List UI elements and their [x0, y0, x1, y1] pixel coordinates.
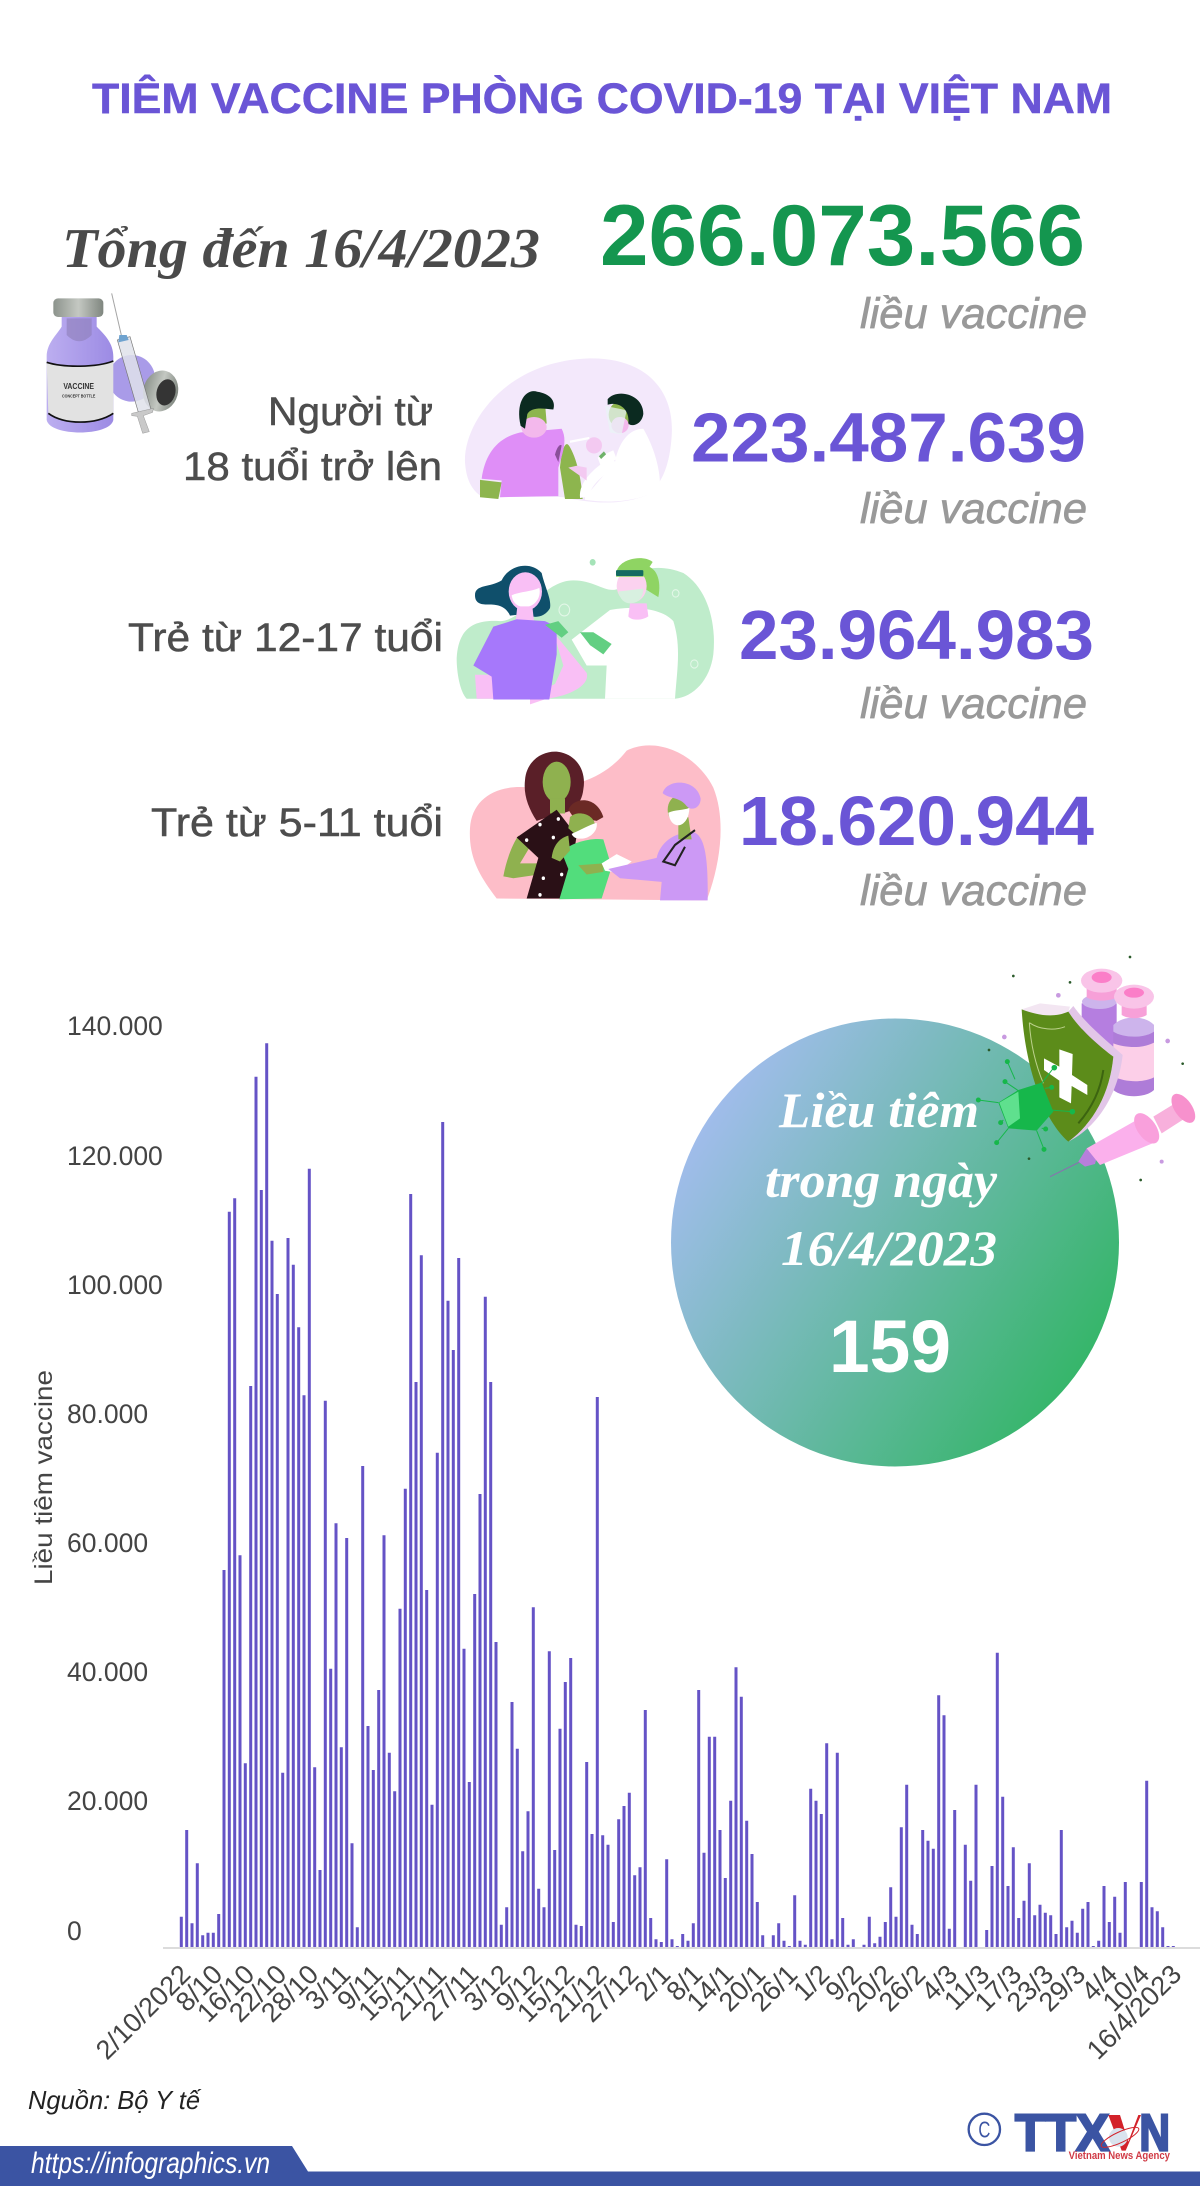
x axis date labels: 9/11 [331, 1959, 388, 2016]
label: 5-11: Trẻ từ 5-11 tuổi [151, 801, 443, 845]
y axis labels [67, 1011, 163, 1946]
x axis date labels: 20/1 [713, 1959, 771, 2017]
icon: vaccine bottle and syringe: CONCEPT BOTTLE [62, 393, 96, 399]
icon: shield, virus, vials and syringe [976, 956, 1200, 1181]
callout text [765, 1082, 998, 1276]
x axis date labels: 3/12 [458, 1959, 516, 2017]
bar chart: daily doses [30, 1011, 1200, 2065]
x axis date labels: 22/10 [223, 1959, 292, 2028]
x axis date labels: 11/3 [938, 1959, 995, 2016]
panel: children 5-11 [151, 745, 1094, 915]
x axis date labels: 29/3 [1033, 1959, 1091, 2017]
adult number: 223.487.639 [691, 398, 1086, 476]
x axis date labels: 28/10 [255, 1959, 324, 2028]
child unit: liều vaccine [860, 867, 1087, 915]
daily bars [181, 1043, 1173, 1947]
total heading: Tổng đến 16/4/2023 [62, 218, 540, 280]
panel: adults 18+ [183, 358, 1087, 533]
y axis labels: 100.000 [67, 1270, 163, 1300]
callout text: trong ngày [765, 1152, 998, 1208]
source note: Nguồn: Bộ Y tế [28, 2085, 202, 2115]
x axis date labels: 2/1 [628, 1959, 676, 2007]
x axis date labels: 9/2 [819, 1959, 867, 2007]
label: 18 and over: Người từ [268, 390, 433, 434]
total number: 266.073.566 [600, 188, 1085, 284]
icon: vaccine bottle and syringe: VACCINE [63, 381, 94, 391]
title: TIÊM VACCINE PHÒNG COVID-19 TẠI VIỆT NAM [92, 74, 1112, 123]
callout number: 159 [829, 1305, 951, 1388]
y axis labels: 0 [67, 1916, 82, 1946]
x axis date labels: 16/10 [191, 1959, 260, 2028]
x axis date labels: 17/3 [969, 1959, 1027, 2017]
x axis date labels: 21/12 [543, 1959, 612, 2028]
child number: 18.620.944 [739, 782, 1094, 860]
x axis date labels [90, 1959, 1187, 2065]
y axis labels: 60.000 [67, 1528, 148, 1558]
y axis labels: 140.000 [67, 1011, 163, 1041]
teen unit: liều vaccine [860, 680, 1087, 728]
y axis labels: 20.000 [67, 1786, 148, 1816]
x axis date labels: 26/1 [745, 1959, 803, 2017]
gradient circle [671, 1018, 1119, 1466]
illustration: teen vaccination [457, 558, 714, 704]
x axis date labels: 9/12 [490, 1959, 548, 2017]
y axis labels: 120.000 [67, 1141, 163, 1171]
x axis date labels: 27/11 [417, 1959, 484, 2027]
logo: TTXVN: C [978, 2117, 990, 2143]
x axis date labels: 1/2 [787, 1959, 835, 2007]
label: 12-17: Trẻ từ 12-17 tuổi [128, 616, 443, 660]
panel: total doses [62, 188, 1087, 338]
x axis date labels: 21/11 [385, 1959, 452, 2027]
adult unit: liều vaccine [860, 485, 1087, 533]
total unit: liều vaccine [860, 290, 1087, 338]
logo: TTXVN: TTX [1015, 2104, 1109, 2162]
x axis date labels: 15/12 [511, 1959, 580, 2028]
logo: TTXVN: N [1139, 2104, 1170, 2162]
website link: https://infographics.vn [31, 2147, 270, 2180]
x axis date labels: 15/11 [353, 1959, 420, 2027]
x axis date labels: 4/4 [1075, 1959, 1123, 2007]
x axis date labels: 26/2 [873, 1959, 931, 2017]
x axis date labels: 14/1 [681, 1959, 739, 2017]
y axis labels: 40.000 [67, 1657, 148, 1687]
x axis date labels: 23/3 [1001, 1959, 1059, 2017]
x axis date labels: 27/12 [575, 1959, 644, 2028]
callout text: Liều tiêm [778, 1082, 979, 1138]
illustration: child vaccination [470, 745, 721, 900]
x axis date labels: 3/11 [299, 1959, 356, 2016]
y axis title: Liều tiêm vaccine [30, 1370, 58, 1585]
callout: doses on the day [671, 956, 1200, 1466]
x axis date labels: 4/3 [915, 1959, 963, 2007]
x axis date labels: 8/1 [660, 1959, 708, 2007]
callout text: 16/4/2023 [781, 1220, 997, 1276]
panel: children 12-17 [128, 558, 1094, 728]
teen number: 23.964.983 [739, 596, 1094, 674]
logo: TTXVN [969, 2104, 1171, 2162]
icon: vaccine bottle and syringe [47, 293, 183, 433]
x axis date labels: 16/4/2023 [1081, 1959, 1187, 2065]
logo: TTXVN: Vietnam News Agency [1069, 2150, 1171, 2162]
label: 18 and over: 18 tuổi trở lên [183, 445, 442, 489]
x axis date labels: 10/4 [1097, 1959, 1155, 2017]
x axis date labels: 2/10/2022 [90, 1959, 196, 2065]
footer banner [0, 2146, 1200, 2186]
y axis labels: 80.000 [67, 1399, 148, 1429]
label: 18 and over [183, 390, 442, 489]
x axis date labels: 8/10 [170, 1959, 228, 2017]
x axis date labels: 20/2 [841, 1959, 899, 2017]
illustration: adult vaccination [465, 358, 672, 503]
